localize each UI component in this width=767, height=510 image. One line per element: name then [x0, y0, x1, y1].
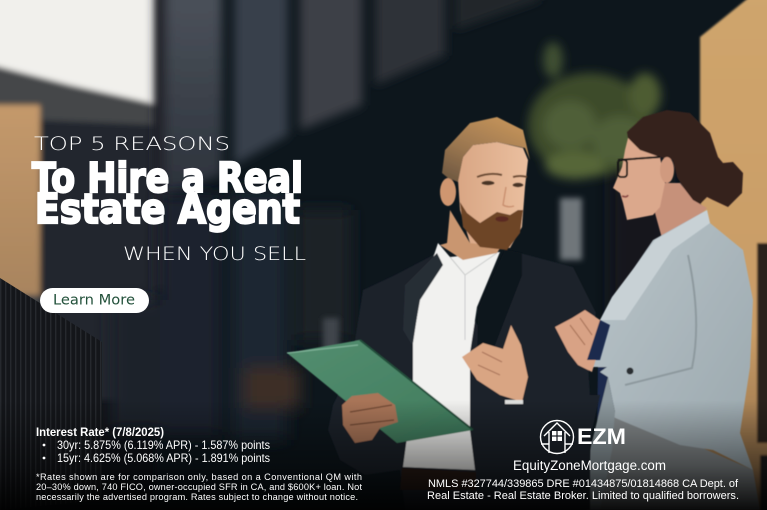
woman blazer — [590, 210, 753, 470]
interest rates: 15yr: 4.625% (5.068% APR) - 1.891% points — [57, 451, 270, 465]
man neck — [440, 210, 505, 260]
man jacket left lapel — [403, 253, 443, 345]
man shirt collar — [450, 253, 497, 340]
man mouth — [496, 216, 508, 222]
man shirt — [403, 243, 500, 470]
right brick building — [700, 0, 767, 510]
website: EquityZoneMortgage.com — [513, 458, 666, 473]
man jacket right lapel — [477, 250, 522, 370]
licensing text: Real Estate - Real Estate Broker. Limited to qualified borrowers. — [427, 490, 739, 502]
title: main heading: To Hire a Real — [32, 154, 303, 202]
man belt — [400, 468, 476, 490]
woman neck — [655, 183, 707, 242]
interest rates: Interest Rate* (7/8/2025) — [36, 427, 164, 439]
blazer lapel — [600, 210, 710, 320]
woman hair and bun — [627, 110, 743, 207]
button: learn more: Learn More — [53, 292, 135, 308]
man raised hand — [462, 325, 528, 402]
rate disclaimer: *Rates shown are for comparison only, based on a Conventional QM with — [36, 472, 362, 482]
blazer sleeve shadow — [625, 255, 696, 385]
title: subheading: WHEN YOU SELL — [123, 244, 306, 265]
woman hands — [555, 310, 600, 372]
logo: EZM house icon — [540, 420, 574, 454]
title: main heading — [32, 154, 303, 233]
blazer lower flap — [587, 377, 615, 510]
man left hand — [342, 393, 398, 443]
man beard — [460, 202, 523, 250]
bottom dark gradient — [0, 400, 767, 510]
woman face — [613, 138, 665, 220]
woman navy top — [597, 238, 668, 430]
man ear — [440, 178, 456, 206]
man eyes and brows — [477, 174, 527, 207]
licensing text — [427, 478, 739, 502]
title: top line: TOP 5 REASONS — [34, 133, 230, 155]
woman trousers — [590, 417, 760, 510]
woman navy cuff — [587, 320, 610, 360]
interest rates: 30yr: 5.875% (6.119% APR) - 1.587% points — [57, 438, 270, 452]
rate disclaimer — [36, 472, 362, 502]
rate disclaimer: 20–30% down, 740 FICO, owner-occupied SFR in CA, and $600K+ loan. Not — [36, 482, 362, 492]
licensing text: NMLS #327744/339865 DRE #01434875/01814868 CA Dept. of — [428, 478, 739, 490]
photo: man — [287, 117, 610, 510]
man face — [458, 142, 528, 248]
woman ear — [660, 157, 674, 183]
green folder — [287, 340, 473, 443]
button: learn more — [40, 288, 149, 313]
woman lips — [622, 195, 628, 197]
left railing — [0, 278, 102, 510]
man cuff — [505, 400, 523, 404]
woman glasses — [618, 157, 660, 177]
man hair — [442, 117, 530, 182]
blazer button — [626, 368, 634, 374]
photo: woman — [587, 110, 760, 510]
rate disclaimer: necessarily the advertised program. Rates subject to change without notice. — [36, 492, 358, 502]
interest rates — [36, 427, 270, 465]
title: main heading: Estate Agent — [35, 185, 300, 233]
logo: EZM wordmark: EZM — [577, 424, 626, 449]
man jacket — [328, 253, 600, 510]
tree foliage — [528, 42, 661, 179]
